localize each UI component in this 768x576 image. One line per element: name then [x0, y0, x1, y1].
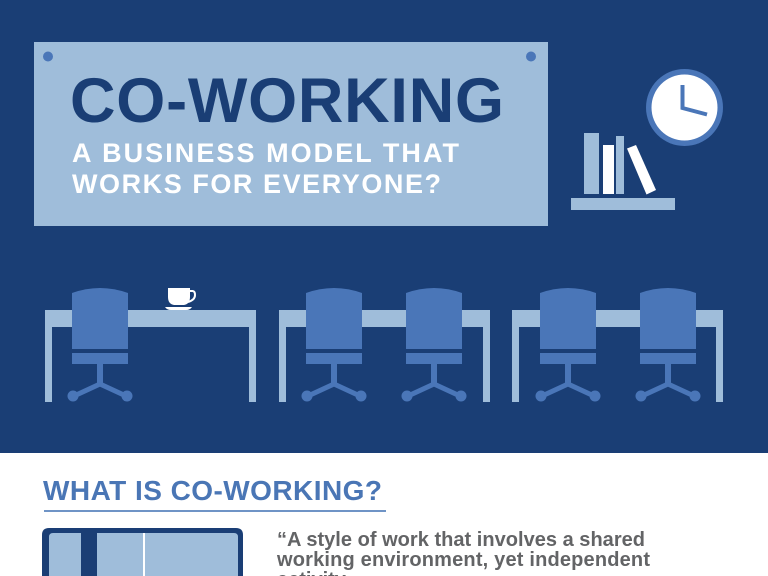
icon: clock: [646, 69, 723, 146]
desk 1 with chair and cup: [45, 288, 256, 402]
subtitle: [72, 138, 460, 199]
desk 3 with two chairs: [512, 288, 723, 402]
subtitle: A BUSINESS MODEL THAT: [72, 138, 460, 168]
header background: [0, 0, 768, 453]
quote text: [276, 529, 650, 576]
icon: books on shelf: [571, 133, 675, 210]
quote text: working environment, yet independent: [276, 549, 650, 571]
subtitle: WORKS FOR EVERYONE?: [72, 169, 441, 199]
illustration: window: [42, 528, 243, 576]
title: CO-WORKING: [70, 66, 504, 136]
title sign: [34, 42, 548, 226]
section heading: WHAT IS CO-WORKING?: [43, 475, 382, 506]
icon: coffee cup: [165, 288, 195, 310]
quote text: “A style of work that involves a shared: [277, 529, 645, 551]
desk 2 with two chairs: [279, 288, 490, 402]
